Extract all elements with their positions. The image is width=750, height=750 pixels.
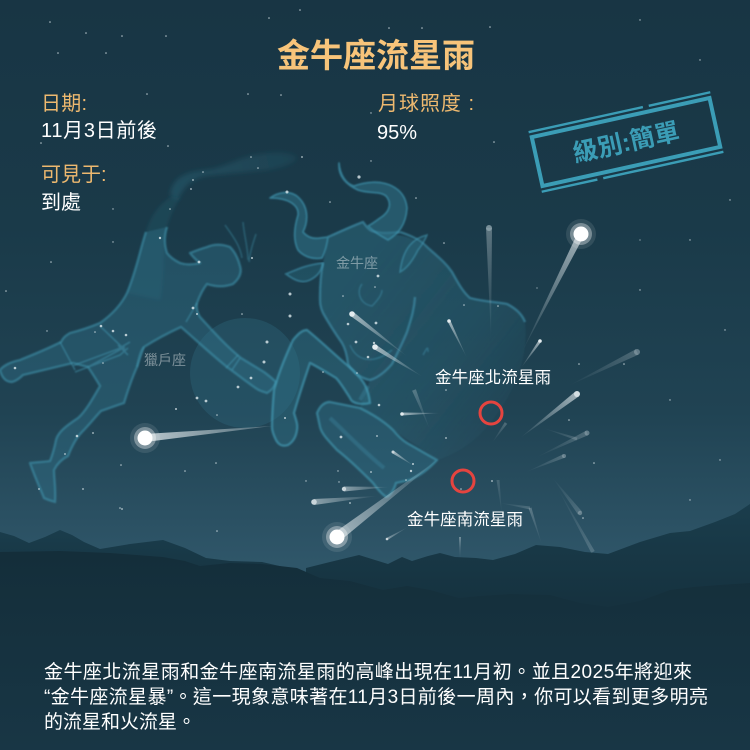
far ridge right	[306, 504, 750, 620]
hunter figure	[0, 227, 276, 502]
background stars	[5, 9, 731, 532]
sword and kilt details	[60, 303, 240, 372]
constellation: Taurus	[270, 163, 526, 497]
near ridge	[0, 551, 750, 750]
difficulty stamp	[529, 92, 723, 192]
small bright meteors	[311, 311, 580, 540]
constellation label: Taurus: 金牛座	[336, 255, 378, 271]
hair strands	[225, 222, 256, 262]
visibility value: 到處	[41, 191, 81, 214]
radiant marker: southern Taurids	[452, 470, 474, 492]
shield disc	[190, 318, 300, 428]
hind leg	[317, 402, 437, 497]
date label: 日期:	[41, 93, 87, 115]
front leg, raised	[272, 330, 370, 446]
label: northern Taurids: 金牛座北流星雨	[435, 368, 551, 387]
radiant marker: northern Taurids	[480, 402, 502, 424]
description paragraph	[44, 661, 708, 733]
title: 金牛座流星雨	[277, 37, 475, 74]
bull back outline	[400, 232, 525, 322]
label: southern Taurids: 金牛座南流星雨	[407, 510, 523, 529]
moon value: 95%	[377, 122, 417, 144]
date value: 11月3日前後	[41, 119, 157, 142]
visibility label: 可見于:	[41, 164, 107, 186]
difficulty stamp: 級別:簡單	[570, 118, 682, 168]
meteor: left fireball	[130, 423, 272, 453]
right horn	[339, 163, 407, 240]
moon label: 月球照度 :	[378, 92, 474, 115]
description paragraph: 金牛座北流星雨和金牛座南流星雨的高峰出現在11月初。並且2025年將迎來	[44, 661, 692, 683]
eye and muzzle details	[350, 284, 428, 359]
far ridge left	[0, 530, 320, 600]
constellation label: Orion: 獵户座	[144, 352, 186, 368]
left horn	[270, 193, 328, 259]
raised arm fade	[127, 196, 180, 300]
faint meteors	[412, 225, 640, 560]
mountains	[0, 504, 750, 750]
meteor: lower centre fireball	[322, 458, 440, 552]
raised arm pelt	[170, 153, 297, 200]
meteor: upper right fireball	[522, 219, 596, 352]
right ear	[400, 235, 427, 272]
bull head outline	[320, 222, 415, 380]
left ear	[286, 263, 323, 282]
description paragraph: 的流星和火流星。	[44, 711, 196, 733]
inner leg line	[330, 386, 384, 468]
description paragraph: “金牛座流星暴”。這一現象意味著在11月3日前後一周內，你可以看到更多明亮	[44, 682, 708, 709]
constellation: Orion	[0, 153, 300, 502]
bull body and head fill	[320, 222, 526, 460]
